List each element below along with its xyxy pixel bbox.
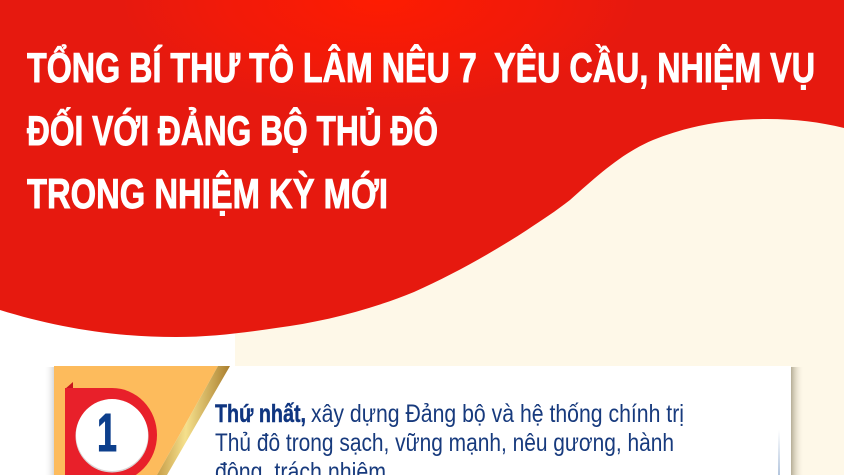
card body text: xây dựng Đảng bộ và hệ thống chính trị <box>311 400 684 428</box>
card body text <box>215 400 684 475</box>
panel: first task card <box>44 366 804 475</box>
orange corner ribbon <box>54 366 230 475</box>
title: TRONG NHIỆM KỲ MỚI <box>27 169 388 217</box>
title <box>27 42 815 217</box>
title: ĐỐI VỚI ĐẢNG BỘ THỦ ĐÔ <box>27 106 438 154</box>
number badge <box>65 382 157 475</box>
number badge: 1 <box>97 403 117 463</box>
card body text: Thủ đô trong sạch, vững mạnh, nêu gương, hành <box>215 429 674 457</box>
header: red wave panel <box>0 0 844 337</box>
card body text: Thứ nhất, <box>215 400 306 428</box>
background: cream area <box>235 100 844 475</box>
